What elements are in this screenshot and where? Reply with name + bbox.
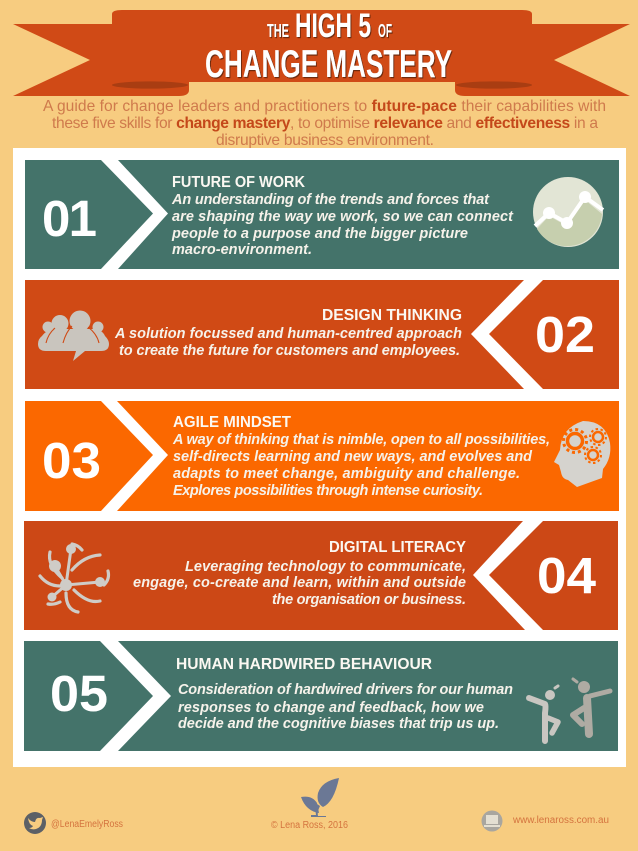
title text: CHANGE MASTERY	[205, 43, 452, 86]
description: agile mindset: A way of thinking that is nimble, open to all possibilities,	[172, 432, 550, 448]
heading: agile mindset: AGILE MINDSET	[173, 414, 291, 431]
number 05: 05	[50, 665, 108, 722]
heading: human hardwired behaviour: HUMAN HARDWIRED BEHAVIOUR	[176, 656, 432, 673]
title text: OF	[378, 21, 392, 41]
description: agile mindset: adapts to meet change, ambiguity and challenge.	[173, 466, 520, 482]
heading: future of work: FUTURE OF WORK	[172, 174, 305, 191]
description: agile mindset: Explores possibilities through intense curiosity.	[173, 483, 483, 499]
number 01: 01	[42, 190, 97, 247]
icon: atom network	[40, 544, 108, 612]
description: digital literacy: the organisation or business.	[272, 592, 466, 608]
description: design thinking: A solution focussed and human-centred approach	[114, 326, 462, 342]
description: digital literacy: Leveraging technology to communicate,	[185, 559, 466, 575]
description: agile mindset	[172, 432, 550, 499]
description: design thinking	[114, 326, 462, 359]
footer: website	[482, 810, 609, 832]
icon: group of people with speech bubble	[38, 310, 109, 361]
description: design thinking: to create the future for customers and employees.	[119, 343, 460, 359]
title banner	[13, 7, 630, 96]
footer: plant logo and copyright: © Lena Ross, 2016	[271, 820, 348, 831]
intro text: these five skills for change mastery, to optimise relevance and effectiveness in a	[52, 115, 598, 132]
description: agile mindset: self-directs learning and new ways, and evolves and	[173, 449, 533, 465]
intro text	[43, 98, 606, 149]
description: future of work: people to a purpose and the bigger picture	[171, 226, 468, 242]
white panel	[13, 148, 626, 767]
panel: 05 human hardwired behaviour	[24, 641, 618, 751]
description: future of work: are shaping the way we work, so we can connect	[172, 209, 514, 225]
icon: bird	[28, 817, 43, 829]
number 04: 04	[537, 547, 597, 604]
description: human hardwired behaviour	[178, 682, 513, 732]
icon: head with gears	[554, 421, 610, 487]
icon: laptop	[484, 815, 500, 827]
intro text: A guide for change leaders and practitioners to future-pace their capabilities with	[43, 98, 606, 115]
icon: dancing figures	[529, 679, 610, 741]
title text: HIGH 5	[295, 7, 371, 45]
description: human hardwired behaviour: responses to change and feedback, how we	[178, 700, 484, 716]
description: future of work	[171, 192, 514, 258]
footer: plant logo and copyright	[271, 778, 348, 831]
title text	[205, 7, 452, 86]
footer: twitter handle	[24, 812, 123, 834]
heading: digital literacy: DIGITAL LITERACY	[329, 539, 466, 556]
number 03: 03	[42, 432, 101, 489]
intro text: disruptive business environment.	[216, 132, 434, 149]
description: future of work: macro-environment.	[172, 242, 312, 258]
number 02: 02	[535, 306, 595, 363]
panel: 02 design thinking	[25, 280, 619, 389]
description: future of work: An understanding of the trends and forces that	[171, 192, 490, 208]
title text: THE	[267, 21, 289, 41]
icon: line chart in circle	[533, 177, 603, 247]
description: digital literacy	[133, 559, 466, 608]
description: human hardwired behaviour: Consideration of hardwired drivers for our human	[178, 682, 513, 698]
heading: design thinking: DESIGN THINKING	[322, 307, 462, 324]
description: human hardwired behaviour: decide and the cognitive biases that trip us up.	[178, 716, 499, 732]
description: digital literacy: engage, co-create and learn, within and outside	[133, 575, 466, 591]
panel: 03 agile mindset	[25, 401, 619, 511]
panel: 04 digital literacy	[24, 521, 618, 630]
icon: plant	[301, 778, 339, 817]
footer: website: www.lenaross.com.au	[512, 815, 609, 826]
panel: 01 future of work	[25, 160, 619, 269]
footer: twitter handle: @LenaEmelyRoss	[51, 819, 123, 830]
